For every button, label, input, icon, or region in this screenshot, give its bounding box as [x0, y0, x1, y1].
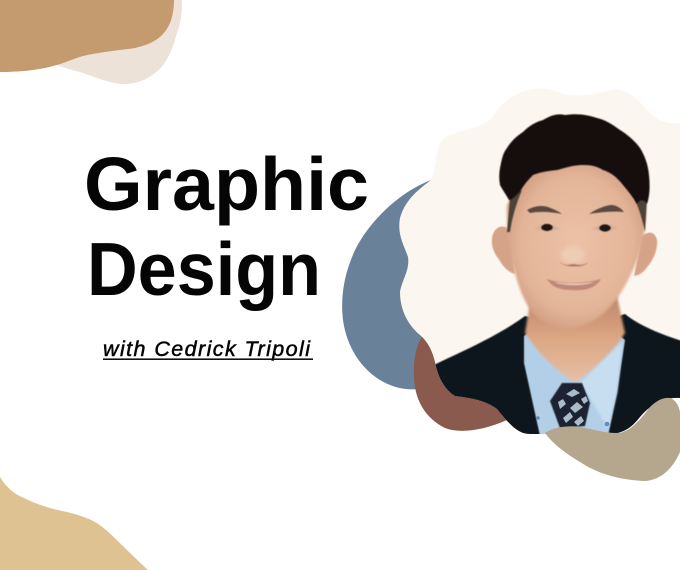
blob: top-left tan: [0, 0, 174, 72]
ears: [492, 227, 657, 276]
title: [84, 142, 369, 311]
left ear: [492, 227, 515, 274]
title line: Design: Design: [87, 227, 321, 311]
shirt: [523, 334, 626, 434]
eyes: [534, 224, 618, 232]
shirt buttons: [536, 416, 609, 426]
hair: [499, 114, 650, 204]
blob: top-left pale: [55, 0, 182, 84]
left fade: [507, 190, 522, 232]
right eye: [592, 225, 618, 231]
nose: [560, 247, 588, 266]
neck: [525, 296, 625, 382]
mouth: [547, 279, 601, 290]
collar highlight: [579, 342, 622, 428]
blob: brown: [414, 335, 507, 431]
subtitle: with Cedrick Tripoli: [103, 337, 311, 361]
right eyebrow: [589, 205, 624, 214]
eyebrows: [527, 205, 624, 214]
suit jacket: [430, 314, 680, 440]
photo background: [399, 88, 680, 420]
right ear: [634, 233, 657, 276]
blob: khaki: [545, 398, 680, 481]
tie pattern: [558, 389, 588, 426]
right fade: [634, 198, 648, 232]
face: [507, 160, 646, 328]
necktie: [550, 383, 590, 428]
left eyebrow: [527, 206, 562, 214]
left eye: [534, 224, 560, 231]
title line: Graphic: Graphic: [84, 142, 369, 226]
blob: slate blue: [342, 180, 450, 389]
portrait photo: [390, 80, 680, 440]
side fades: [507, 190, 647, 232]
blob: bottom-left sand: [0, 477, 148, 570]
